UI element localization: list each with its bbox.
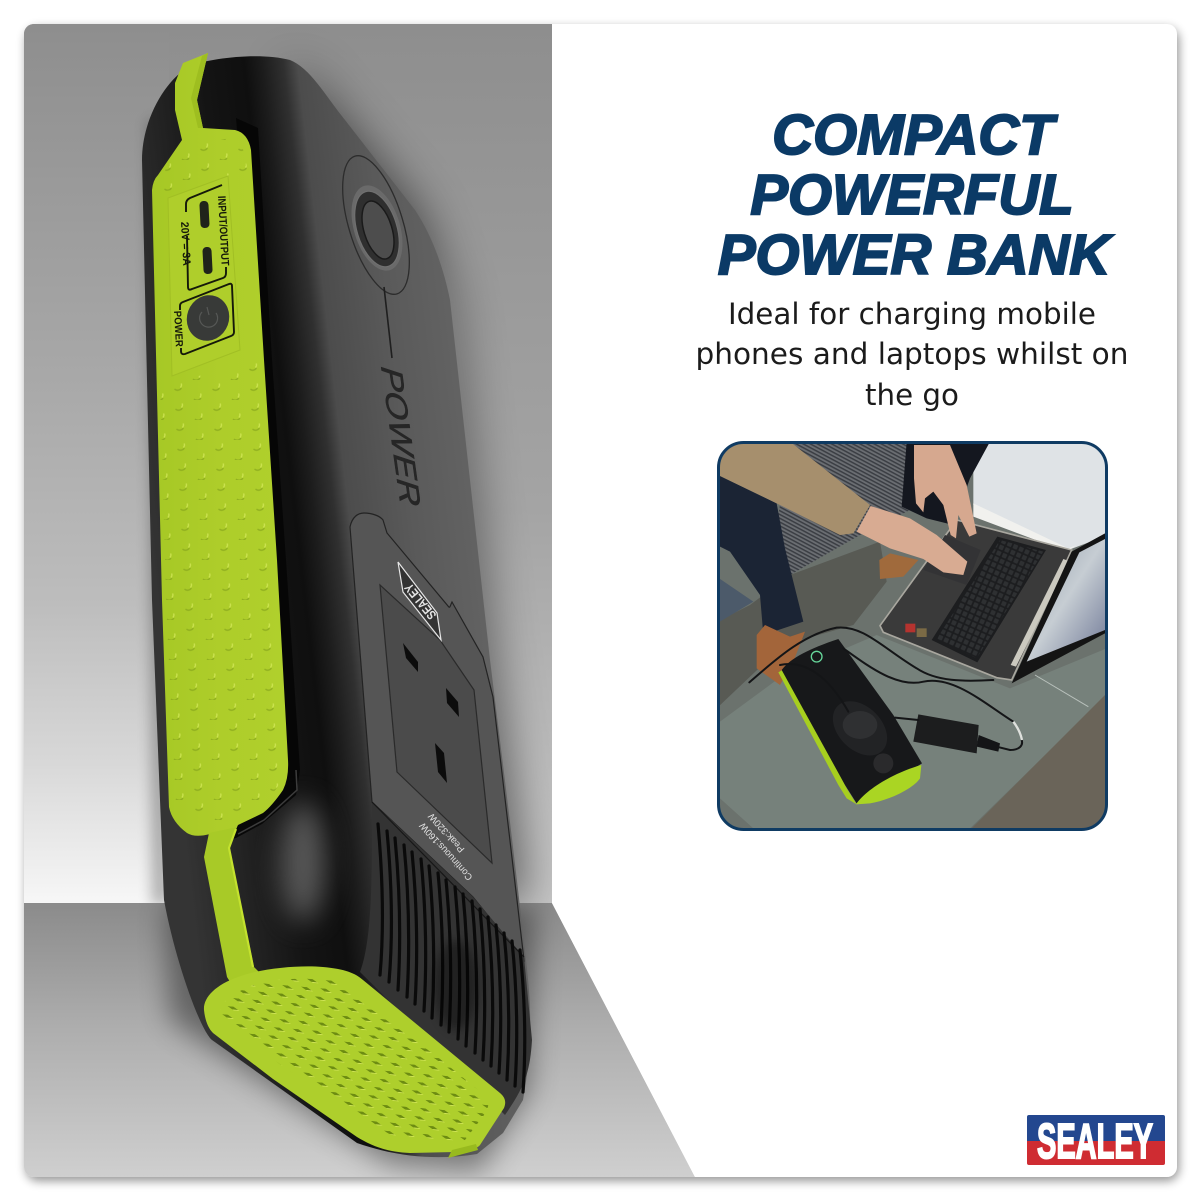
input/output label: INPUT/OUTPUT bbox=[215, 196, 231, 266]
rating text: Continuous:160W bbox=[418, 820, 475, 882]
glass shelf strut bbox=[1035, 675, 1088, 707]
touchpad bbox=[923, 535, 981, 585]
green top strap and side strip bbox=[152, 53, 288, 842]
screen image bbox=[1027, 539, 1105, 662]
green end plate bbox=[204, 966, 505, 1158]
input/output bracket bbox=[186, 185, 226, 290]
cables bbox=[749, 627, 1022, 750]
far hand bbox=[914, 445, 977, 538]
vent slots bbox=[378, 824, 525, 1092]
lower grip dots bbox=[160, 362, 286, 821]
power button bbox=[186, 295, 230, 341]
photo: power bank charging a laptop bbox=[717, 442, 1110, 832]
wall bbox=[973, 442, 1108, 550]
far shoe bbox=[879, 553, 918, 579]
sofa bbox=[778, 442, 923, 575]
vent panel bbox=[360, 802, 532, 1115]
fan button bbox=[342, 155, 410, 295]
heading: POWER BANK bbox=[718, 223, 1114, 286]
usb-c ports bbox=[199, 201, 213, 274]
divider line bbox=[384, 287, 392, 358]
brand badge: SEALEY bbox=[401, 580, 439, 623]
description text: Ideal for charging mobile bbox=[728, 297, 1096, 331]
white cable section bbox=[1013, 722, 1022, 740]
power label: POWER bbox=[171, 311, 185, 347]
rating text: Peak:320W bbox=[426, 811, 467, 854]
heading: POWERFUL bbox=[750, 163, 1074, 226]
side highlight bbox=[281, 802, 325, 922]
laptop keys bbox=[937, 540, 1043, 658]
photo frame bbox=[718, 442, 1106, 830]
skirting bbox=[973, 503, 1077, 552]
voltage label: 20V = 3A bbox=[178, 222, 192, 266]
far trouser leg bbox=[902, 442, 990, 525]
socket plate bbox=[350, 513, 524, 960]
upper grip dots bbox=[164, 139, 247, 191]
power bank bbox=[142, 53, 532, 1158]
end plate tab bbox=[448, 1144, 478, 1158]
glass tint bbox=[720, 635, 1107, 828]
strip recess shadow bbox=[234, 118, 300, 838]
logo red band bbox=[1027, 1141, 1165, 1165]
stickers bbox=[905, 624, 927, 637]
carpet corner bbox=[970, 692, 1108, 830]
glass floor bbox=[717, 442, 1110, 832]
dark carpet under glass bbox=[717, 542, 887, 708]
lower strap highlight bbox=[229, 829, 253, 967]
brand badge bbox=[398, 562, 441, 640]
description text bbox=[696, 297, 1128, 412]
description text: phones and laptops whilst on bbox=[696, 337, 1128, 371]
near trouser leg bbox=[717, 474, 803, 635]
power bank side edge bbox=[778, 668, 857, 804]
backdrop wall bbox=[24, 24, 552, 905]
socket recess bbox=[380, 585, 492, 863]
description text: the go bbox=[865, 378, 959, 412]
logo: Sealey bbox=[1027, 1115, 1165, 1169]
strap inner edge bbox=[191, 53, 208, 128]
socket pin holes bbox=[403, 643, 459, 783]
speaker holes bbox=[434, 940, 478, 1030]
hinge bbox=[1011, 559, 1069, 667]
laptop keyboard bbox=[932, 537, 1046, 662]
sleeve bbox=[717, 442, 870, 535]
sofa left bbox=[717, 577, 753, 622]
power bank in photo bbox=[782, 639, 922, 803]
charger plug bbox=[977, 735, 1000, 752]
end plate holes bbox=[220, 979, 489, 1143]
product panel: studio backdrop and power bank bbox=[24, 24, 695, 1177]
body silhouette bbox=[142, 56, 530, 1157]
laptop base bbox=[880, 520, 1072, 680]
heading: COMPACT bbox=[772, 103, 1058, 166]
vent grille bbox=[873, 753, 893, 773]
charger bbox=[913, 714, 979, 753]
power wordmark: POWER bbox=[374, 365, 427, 507]
power bracket bbox=[180, 284, 234, 354]
logo blue band bbox=[1027, 1115, 1165, 1141]
backdrop floor bbox=[24, 903, 695, 1177]
recess ledge bbox=[238, 770, 297, 834]
screen bbox=[1012, 533, 1105, 683]
plug bbox=[822, 691, 898, 766]
near hand bbox=[857, 506, 967, 575]
LED ring bbox=[811, 651, 822, 662]
green end cap bbox=[856, 765, 921, 804]
port panel bbox=[168, 176, 240, 376]
near shoe bbox=[757, 625, 805, 685]
heading bbox=[718, 103, 1114, 286]
lower green strap bbox=[204, 827, 258, 980]
